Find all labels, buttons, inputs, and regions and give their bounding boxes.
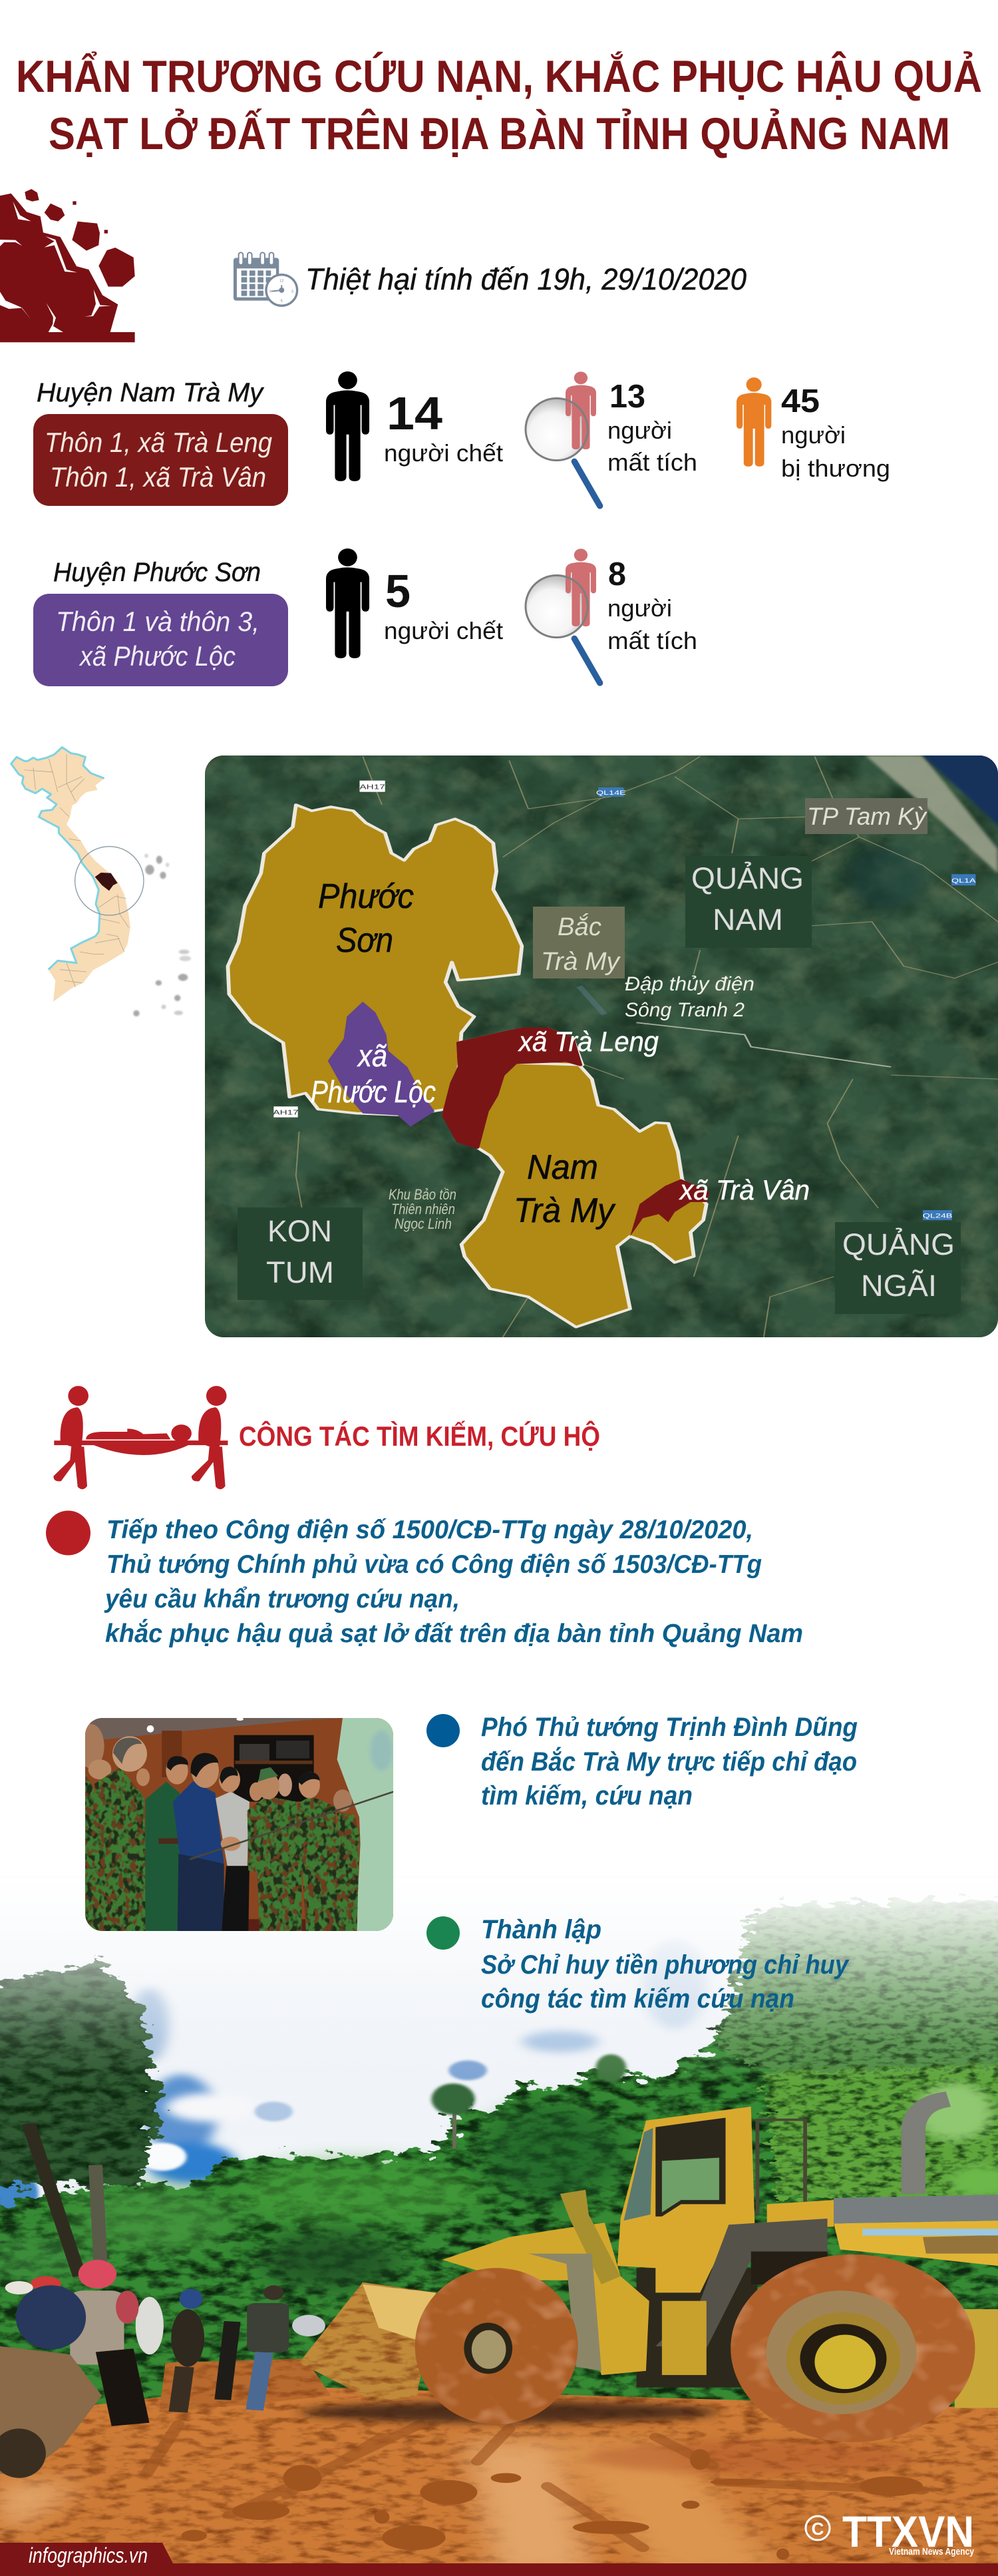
text: forward command — [481, 1915, 850, 2014]
stat: 8 missing: 8 — [608, 556, 626, 592]
stat: 5 dead — [384, 565, 503, 644]
stat: 13 missing: người — [607, 417, 672, 444]
map label: Kon Tum: TUM — [266, 1255, 334, 1289]
stat: 14 dead — [384, 387, 503, 467]
icon: stretcher rescue — [53, 1386, 228, 1489]
map label: Phước Sơn: Sơn — [336, 921, 393, 960]
satellite map — [205, 752, 998, 1337]
map label: Bắc Trà My: Bắc — [558, 913, 601, 941]
map label: nature reserve: Ngọc Linh — [395, 1215, 452, 1232]
commune box: xã Phước Lộc — [79, 640, 236, 672]
road labels: QL24B — [923, 1212, 952, 1219]
stat: 45 injured: bị thương — [781, 455, 890, 482]
bullet: red — [46, 1511, 90, 1555]
map label: TP Tam Kỳ: TP Tam Kỳ — [807, 803, 927, 830]
icon: magnifier with missing person — [526, 548, 600, 683]
map label: xã Trà Leng: xã Trà Leng — [518, 1026, 659, 1057]
icon: dead person — [326, 548, 369, 658]
stat: 13 missing: mất tích — [607, 449, 697, 476]
icon: calendar and clock: 3 — [291, 290, 293, 294]
text: government dispatch: Tiếp theo Công điện số 1500/CĐ-TTg ngày 28/10/2020, — [106, 1516, 753, 1544]
bullet: green — [426, 1916, 460, 1950]
commune box: Thôn 1 và thôn 3, — [56, 606, 259, 637]
stat: 45 injured — [781, 383, 890, 482]
icon: calendar and clock: 12 — [279, 279, 283, 283]
bullet: blue — [426, 1714, 460, 1747]
stat: 13 missing — [607, 379, 697, 476]
commune box — [33, 594, 288, 686]
district: Nam Trà My — [444, 1028, 707, 1327]
map label: dam: Đập thủy điện — [625, 973, 754, 995]
map label: Quảng Ngãi — [835, 1222, 961, 1314]
text: forward command: Sở Chỉ huy tiền phương chỉ huy — [481, 1950, 850, 1980]
logo: TTXVN: Vietnam News Agency — [889, 2546, 975, 2557]
stat: 8 missing: mất tích — [607, 627, 697, 654]
footer bar — [0, 2543, 998, 2576]
footer bar: infographics.vn — [29, 2543, 148, 2567]
commune box: Thôn 1, xã Trà Vân — [50, 461, 266, 493]
road labels: AH17 — [273, 1108, 299, 1116]
map label: xã Phước Lộc: Phước Lộc — [311, 1074, 436, 1109]
icon: dead person — [326, 371, 369, 481]
icon: calendar and clock — [234, 252, 297, 306]
map label: nature reserve — [389, 1186, 456, 1232]
map label: dam — [625, 973, 754, 1021]
commune box: Thôn 1, xã Trà Leng — [45, 427, 272, 458]
date text: Thiệt hại tính đến 19h, 29/10/2020 — [305, 262, 747, 296]
stat: 13 missing: 13 — [609, 379, 645, 415]
stat: 45 injured: người — [781, 421, 846, 449]
road labels — [273, 781, 976, 1220]
map label: Quảng Nam — [685, 856, 812, 948]
map label: Bắc Trà My: Trà My — [541, 948, 621, 976]
heading: search and rescue: CÔNG TÁC TÌM KIẾM, CỨU HỘ — [239, 1420, 600, 1452]
map label: nature reserve: Thiên nhiên — [391, 1201, 455, 1217]
road labels: AH17 — [359, 783, 385, 791]
map label: Quảng Ngãi: NGÃI — [861, 1269, 937, 1303]
icon: falling rocks — [0, 189, 135, 342]
road — [0, 2358, 998, 2576]
map label: Kon Tum: KON — [267, 1214, 332, 1248]
icon: magnifier with missing person — [526, 371, 600, 506]
map label: xã Phước Lộc: xã — [357, 1038, 387, 1073]
text: deputy prime minister — [481, 1713, 858, 1811]
stat: 8 missing: người — [607, 594, 672, 622]
commune box — [33, 414, 288, 506]
map label: Phước Sơn: Phước — [318, 877, 414, 916]
loader — [299, 2099, 998, 2442]
map label: Phước Sơn — [319, 883, 414, 953]
logo: TTXVN: TTXVN — [842, 2507, 974, 2556]
icon: injured person — [737, 377, 771, 467]
stat: 45 injured: 45 — [781, 383, 820, 419]
text: government dispatch: Thủ tướng Chính phủ vừa có Công điện số 1503/CĐ-TTg — [106, 1550, 762, 1579]
map label: Quảng Nam: NAM — [713, 903, 783, 937]
text: government dispatch — [104, 1516, 803, 1648]
text: deputy prime minister: Phó Thủ tướng Trịnh Đình Dũng — [481, 1713, 858, 1742]
district label: Huyện Phước Sơn — [53, 558, 261, 587]
map label: xã Trà Vân: xã Trà Vân — [679, 1174, 810, 1205]
photo: officials with map — [78, 1717, 395, 1931]
text: government dispatch: yêu cầu khẩn trương cứu nạn, — [104, 1585, 460, 1613]
white fade at top of photo — [0, 1877, 998, 2083]
commune: Trà Leng — [444, 1028, 580, 1148]
text: government dispatch: khắc phục hậu quả sạt lở đất trên địa bàn tỉnh Quảng Nam — [105, 1619, 803, 1648]
title — [16, 51, 982, 159]
locator map of Vietnam — [11, 748, 191, 1016]
panel: Nam Trà My — [33, 371, 890, 506]
text: forward command: công tác tìm kiếm cứu nạn — [481, 1984, 794, 2014]
stat: 8 missing — [607, 556, 697, 654]
map label: Quảng Ngãi: QUẢNG — [842, 1227, 955, 1261]
panel: Phước Sơn — [33, 548, 697, 686]
map label: Nam Trà My — [516, 1155, 616, 1230]
district label: Huyện Nam Trà My — [37, 378, 265, 407]
commune: Phước Lộc — [328, 1002, 434, 1127]
district: Phước Sơn — [228, 805, 522, 1116]
icon: calendar and clock: 6 — [281, 299, 283, 303]
text: deputy prime minister: đến Bắc Trà My trực tiếp chỉ đạo — [481, 1746, 857, 1777]
logo: TTXVN: C — [812, 2519, 824, 2539]
background landslide photo — [0, 1877, 998, 2576]
icon: calendar and clock: 9 — [269, 290, 271, 294]
map label: Bắc Trà My — [533, 907, 625, 978]
text: forward command: Thành lập — [481, 1915, 601, 1944]
map label: Quảng Nam: QUẢNG — [691, 861, 804, 895]
stat: 5 dead: 5 — [385, 565, 411, 617]
map on wall — [337, 1718, 395, 1931]
people and motorbike — [0, 2260, 325, 2478]
map label: Nam Trà My: Trà My — [514, 1191, 616, 1230]
road labels: QL14E — [596, 789, 626, 796]
map label: nature reserve: Khu Bảo tồn — [389, 1186, 456, 1203]
map label: Nam Trà My: Nam — [527, 1148, 598, 1187]
text: deputy prime minister: tìm kiếm, cứu nạn — [481, 1781, 693, 1811]
map label: dam: Sông Tranh 2 — [625, 999, 745, 1021]
stat: 14 dead: 14 — [387, 387, 442, 439]
stat: 14 dead: người chết — [384, 439, 503, 467]
map label: Kon Tum — [238, 1207, 363, 1300]
commune: Trà Vân — [630, 1179, 710, 1236]
road labels: QL1A — [951, 877, 976, 884]
stat: 5 dead: người chết — [384, 617, 503, 644]
map label: xã Phước Lộc — [311, 1038, 436, 1109]
